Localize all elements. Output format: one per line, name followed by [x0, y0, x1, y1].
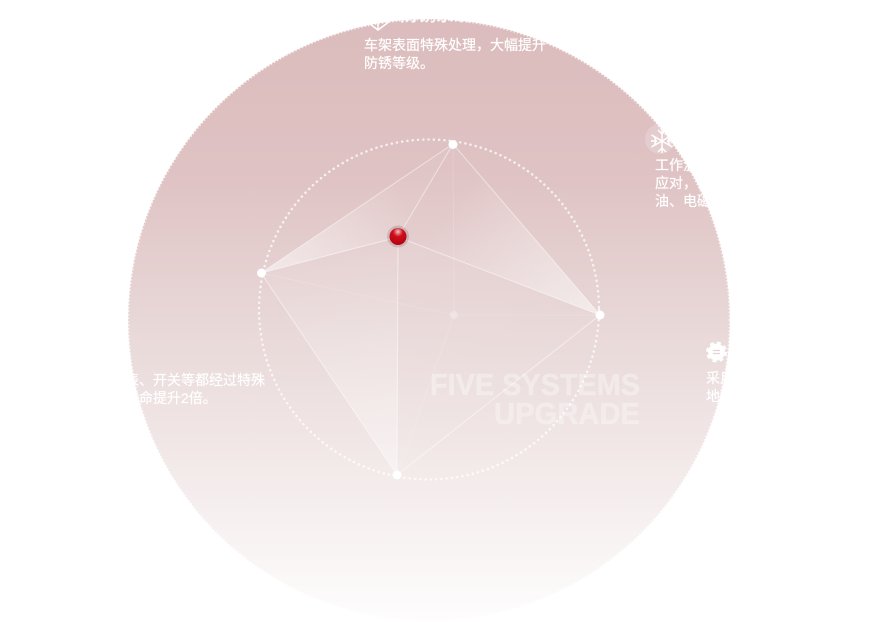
axis points — [257, 140, 604, 480]
dotted outer ring — [259, 140, 599, 480]
panel: circular backdrop — [128, 19, 730, 621]
faint axes — [261, 144, 600, 475]
cooling text: 应对，低温机 — [655, 175, 739, 191]
gear text: 地面 — [706, 388, 734, 404]
cooling text: 油、电磁阀 — [655, 193, 725, 209]
cooling text: 工作温度范围 — [655, 157, 739, 173]
feature: rust protection — [364, 19, 546, 70]
feature: electrical — [133, 372, 265, 404]
centre dot — [450, 311, 458, 319]
icon: snowflake — [645, 124, 675, 154]
radar outline — [261, 144, 600, 475]
watermark heading: UPGRADE — [494, 396, 640, 431]
clipped feature blocks — [133, 19, 727, 404]
electrical text: 仪表、开关等都经过特殊 — [111, 372, 265, 388]
feature: cooling — [645, 124, 708, 208]
radar facets — [261, 144, 600, 475]
rust text: 防锈等级。 — [364, 55, 434, 71]
rust text: 车架表面特殊处理，大幅提升 — [364, 37, 546, 53]
watermark heading: FIVE SYSTEMS — [430, 367, 640, 402]
radar chart — [257, 140, 604, 480]
electrical text: 使用寿命提升2倍。 — [97, 390, 217, 406]
watermark heading — [430, 367, 640, 431]
icon: shield — [370, 22, 390, 31]
red marker ball — [387, 226, 409, 248]
icon: gear — [707, 342, 726, 362]
rust heading: 防锈系统 — [400, 4, 472, 25]
gear text: 采用 — [706, 370, 734, 386]
feature: gear — [706, 342, 727, 402]
